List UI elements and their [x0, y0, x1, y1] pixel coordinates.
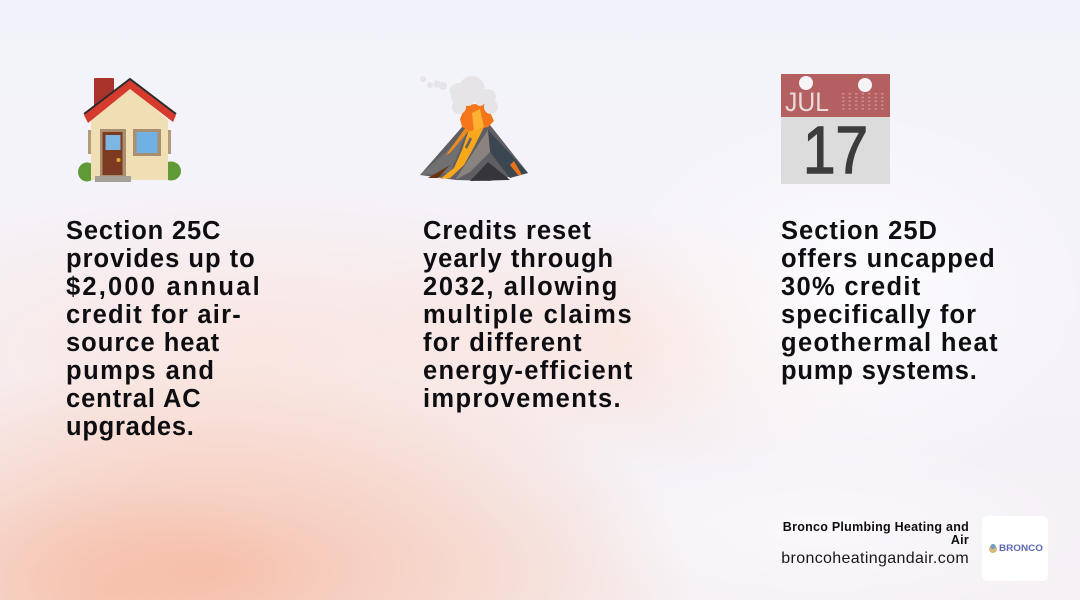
icon: calendar: JUL — [785, 87, 829, 117]
icon: house — [78, 78, 181, 182]
text block: section 25D: pump systems. — [781, 357, 978, 385]
brand name: Bronco Plumbing Heating and — [783, 520, 969, 534]
text block: credits reset: improvements. — [423, 385, 622, 413]
website: broncoheatingandair.com — [781, 550, 969, 567]
text block: section 25C: provides up to — [66, 245, 256, 273]
text block: section 25C: source heat — [66, 329, 220, 357]
icon: calendar: 17 — [803, 113, 868, 188]
text block: credits reset — [423, 217, 634, 413]
brand name: Air — [951, 533, 969, 547]
text block: section 25C: Section 25C — [66, 217, 221, 245]
text block: section 25C: credit for air- — [66, 301, 242, 329]
text block: section 25C — [66, 217, 262, 441]
text block: section 25C: pumps and — [66, 357, 216, 385]
text block: credits reset: yearly through — [423, 245, 614, 273]
text block: section 25C: $2,000 annual — [66, 273, 262, 301]
icon: volcano — [420, 76, 528, 181]
text block: section 25C: central AC — [66, 385, 202, 413]
logo card — [982, 516, 1048, 581]
brand name — [783, 520, 969, 547]
logo: Bronco: BRONCO — [999, 543, 1043, 554]
text block: section 25D: specifically for — [781, 301, 977, 329]
text block: section 25D — [781, 217, 999, 385]
icon: calendar — [781, 74, 890, 188]
text block: credits reset: energy-efficient — [423, 357, 634, 385]
text block: credits reset: 2032, allowing — [423, 273, 619, 301]
text block: credits reset: for different — [423, 329, 583, 357]
text block: section 25C: upgrades. — [66, 413, 195, 441]
text block: section 25D: 30% credit — [781, 273, 922, 301]
text block: credits reset: Credits reset — [423, 217, 592, 245]
text block: section 25D: offers uncapped — [781, 245, 996, 273]
text block: credits reset: multiple claims — [423, 301, 633, 329]
text block: section 25D: geothermal heat — [781, 329, 999, 357]
text block: section 25D: Section 25D — [781, 217, 938, 245]
